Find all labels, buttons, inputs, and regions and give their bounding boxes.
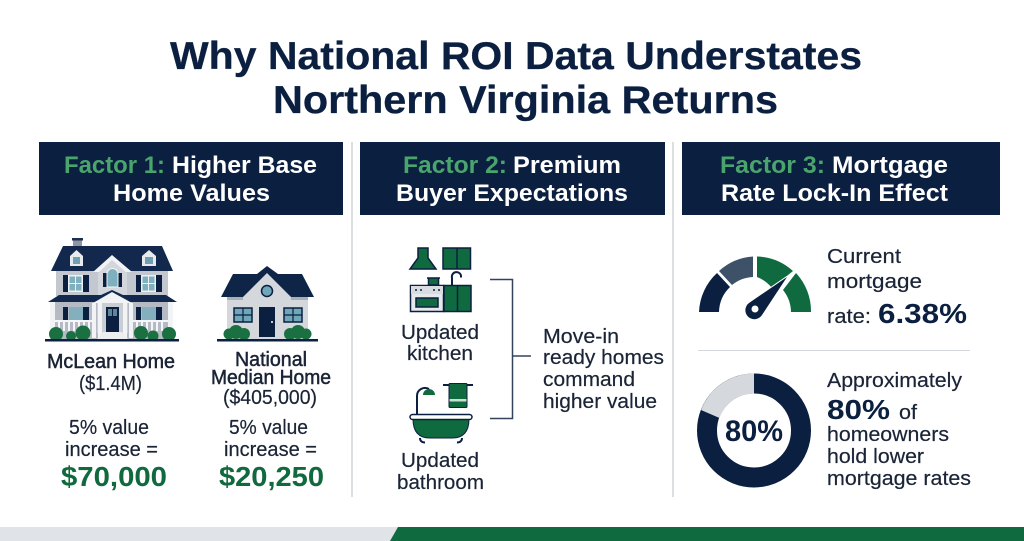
heading: factor 2: Buyer Expectations [396,180,628,207]
value: national increase: $20,250 [219,461,324,492]
title [170,35,862,122]
heading: factor 3: Rate Lock-In Effect [721,180,948,207]
text: move-in ready: higher value [543,390,657,413]
text: national increase [224,416,317,461]
text: national increase: 5% value [229,416,308,439]
gauge: mortgage rate [699,256,811,319]
text: homeowners: Approximately [827,369,963,392]
text: homeowners: hold lower [827,445,924,468]
text: move-in ready: ready homes [543,346,664,369]
text: homeowners: 80% [827,394,890,425]
heading: factor 2: Factor 2: [403,152,507,179]
heading: factor 2: Premium [513,152,621,179]
text: national median home: National [235,349,307,371]
text: homeowners [827,369,971,490]
text: homeowners: homeowners [827,423,949,446]
bracket connector [490,280,531,418]
title: Why National ROI Data Understates [170,35,862,78]
text: national median home: ($405,000) [223,386,317,409]
label: updated kitchen: Updated [401,321,479,344]
icon: kitchen [410,248,471,312]
text: national median home [211,349,331,409]
text: current mortgage rate: Current [827,245,901,268]
panel: factor 3 [682,142,1000,490]
text: current mortgage rate: rate: [827,305,871,328]
text: current mortgage rate: mortgage [827,270,922,293]
text: McLean home: McLean Home [47,351,175,373]
value: McLean increase: $70,000 [61,461,167,492]
text: McLean home [47,351,175,395]
heading: factor 3 [682,142,1000,215]
text: national increase: increase = [224,438,317,461]
panel: factor 1 [39,142,343,492]
panel dividers [351,142,674,497]
label: updated kitchen [401,321,479,365]
heading: factor 3: Factor 3: [720,152,825,179]
text: McLean increase: increase = [65,438,158,461]
icon: bathroom [410,384,473,442]
text: move-in ready: Move-in [543,325,619,348]
text: national median home: Median Home [211,367,331,389]
text: McLean increase [65,416,158,461]
text: homeowners: mortgage rates [827,467,971,490]
text: move-in ready: command [543,368,635,391]
label: updated bathroom [397,449,484,494]
text: McLean increase: 5% value [69,416,149,439]
donut chart: 80% [701,374,801,478]
text: current mortgage rate: 6.38% [878,298,967,329]
text: homeowners: of [899,401,917,424]
heading: factor 1 [39,142,343,215]
label: updated bathroom: Updated [401,449,479,472]
heading: factor 1: Higher Base [172,152,317,179]
label: updated kitchen: kitchen [407,342,473,365]
heading: factor 1: Factor 1: [64,152,165,179]
label: updated bathroom: bathroom [397,471,484,494]
heading: factor 3: Mortgage [832,152,948,179]
text: current mortgage rate [827,245,967,329]
footer band [0,527,1024,541]
title: Northern Virginia Returns [273,79,778,122]
icon: small median house [217,266,318,342]
donut chart: 80%: 80% [725,415,783,448]
heading: factor 1: Home Values [113,180,270,207]
heading: factor 2 [360,142,665,215]
icon: large McLean house [45,238,179,342]
text: McLean home: ($1.4M) [79,372,142,395]
panel: factor 2 [360,142,665,494]
text: move-in ready [543,325,664,413]
